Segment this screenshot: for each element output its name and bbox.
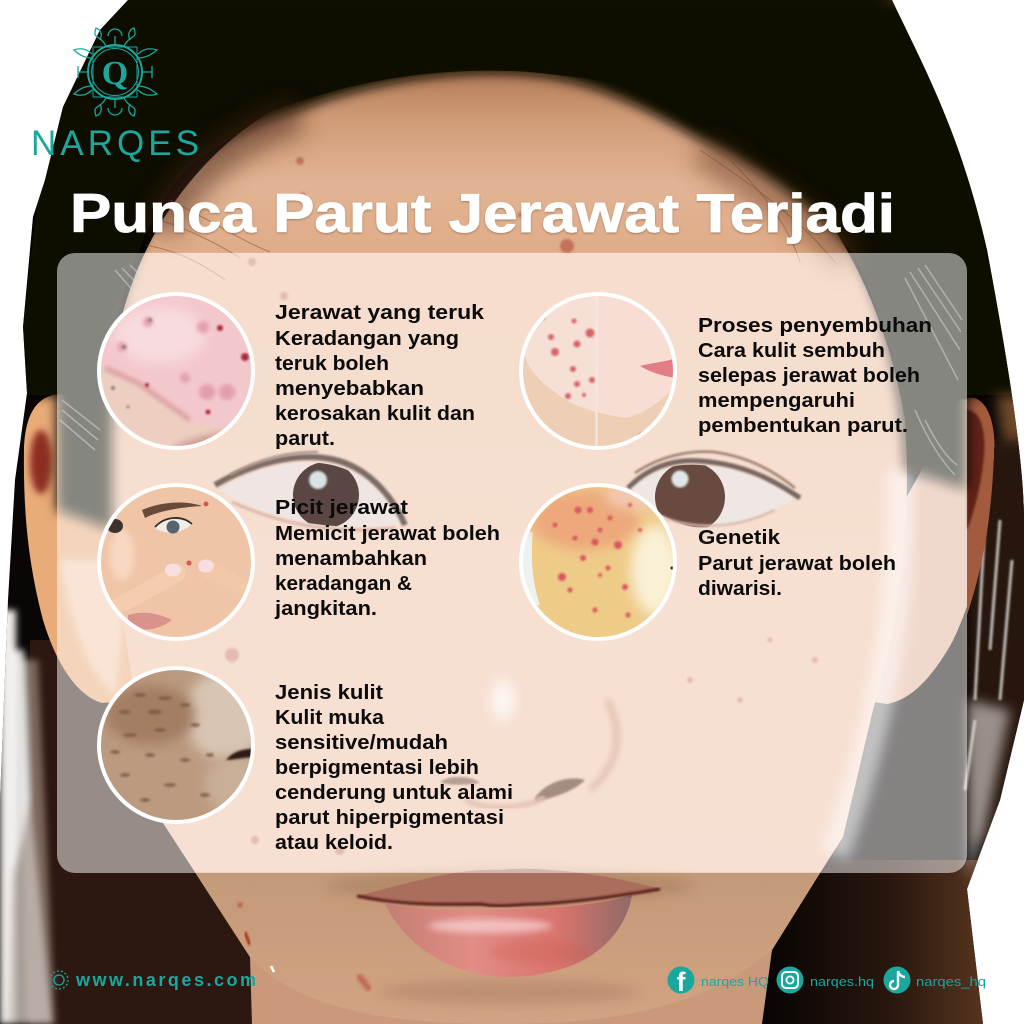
- website footer: [50, 970, 256, 990]
- text: Jenis kulit: Jenis kulit: [275, 682, 383, 704]
- logo wordmark: NARQES: [31, 124, 199, 163]
- text: Picit jerawat: Picit jerawat: [275, 497, 408, 519]
- text: Jerawat yang teruk: menyebabkan: [275, 378, 424, 400]
- text: Jerawat yang teruk: kerosakan kulit dan: [275, 403, 475, 425]
- left ear: [24, 394, 140, 703]
- text: Jerawat yang teruk: Keradangan yang: [275, 328, 459, 350]
- text: Genetik: diwarisi.: [698, 578, 782, 600]
- right eye: [628, 452, 800, 532]
- hair streaks under panel: [60, 265, 962, 475]
- text: Jenis kulit: atau keloid.: [275, 832, 393, 854]
- icon: instagram: [776, 966, 804, 994]
- pale strands right: [965, 520, 1012, 790]
- text: Proses penyembuhan: Proses penyembuhan: [698, 315, 932, 337]
- icon: tiktok: [884, 966, 910, 994]
- text: Genetik: Parut jerawat boleh: [698, 553, 896, 575]
- tiktok handle: narqes_hq: [916, 974, 986, 989]
- photo: healing process: [518, 290, 683, 455]
- text: Jenis kulit: sensitive/mudah: [275, 732, 448, 754]
- text: Jenis kulit: Kulit muka: [275, 707, 385, 729]
- face skin: [108, 71, 907, 1024]
- translucent panel: [57, 253, 967, 873]
- logo: [31, 28, 199, 163]
- text: Jerawat yang teruk: teruk boleh: [275, 353, 389, 375]
- text: Proses penyembuhan: pembentukan parut.: [698, 415, 908, 437]
- text: Jenis kulit: cenderung untuk alami: [275, 782, 513, 804]
- blemishes: [225, 157, 818, 990]
- left eye: [215, 452, 405, 530]
- photo: squeezing pimple: [95, 480, 260, 645]
- icon: facebook: f: [676, 967, 686, 997]
- instagram handle: narqes.hq: [810, 974, 874, 989]
- mouth area shadow: [325, 870, 695, 902]
- fine forehead strands: [145, 150, 835, 280]
- social links: [668, 966, 986, 997]
- neck: [200, 873, 820, 1024]
- front hair with soft hairline: [15, 0, 1024, 530]
- chin shadow: [380, 980, 640, 1004]
- text: Proses penyembuhan: mempengaruhi: [698, 390, 855, 412]
- right ear: [860, 398, 994, 704]
- photo: skin type: [97, 666, 255, 824]
- icon: website emblem: [50, 971, 68, 989]
- text: Proses penyembuhan: selepas jerawat boleh: [698, 365, 920, 387]
- website address: www.narqes.com: [75, 970, 256, 990]
- text: Jerawat yang teruk: [275, 302, 485, 450]
- text: Picit jerawat: keradangan &: [275, 573, 412, 595]
- text: Proses penyembuhan: Cara kulit sembuh: [698, 340, 885, 362]
- photo: genetics: [518, 480, 683, 645]
- text: Proses penyembuhan: [698, 315, 932, 437]
- text: Picit jerawat: [274, 497, 500, 620]
- text: Jenis kulit: [275, 682, 513, 854]
- nose: [440, 680, 617, 807]
- pale mottled hair strands left: [0, 610, 55, 1024]
- logo emblem: [74, 28, 157, 116]
- photo: severe acne: [95, 290, 260, 455]
- text: Jerawat yang teruk: parut.: [275, 428, 335, 450]
- text: Picit jerawat: menambahkan: [275, 548, 427, 570]
- warm forehead shadow: [160, 115, 850, 260]
- logo letter: Q: [102, 55, 128, 92]
- lips: [357, 869, 660, 977]
- text: Picit jerawat: jangkitan.: [274, 598, 377, 620]
- text: Picit jerawat: Memicit jerawat boleh: [275, 523, 500, 545]
- text: Jenis kulit: berpigmentasi lebih: [275, 757, 479, 779]
- facebook handle: narqes HQ: [701, 974, 769, 989]
- fading hair tips right: [968, 700, 1010, 880]
- cheek side bright rim: [835, 470, 901, 855]
- text: Genetik: [698, 527, 896, 600]
- title: Punca Parut Jerawat Terjadi: [70, 182, 895, 244]
- icon: facebook: [668, 966, 694, 997]
- text: Jerawat yang teruk: Jerawat yang teruk: [275, 302, 485, 324]
- text: Jenis kulit: parut hiperpigmentasi: [275, 807, 504, 829]
- text: Genetik: Genetik: [698, 527, 781, 549]
- ear blend: [60, 560, 130, 695]
